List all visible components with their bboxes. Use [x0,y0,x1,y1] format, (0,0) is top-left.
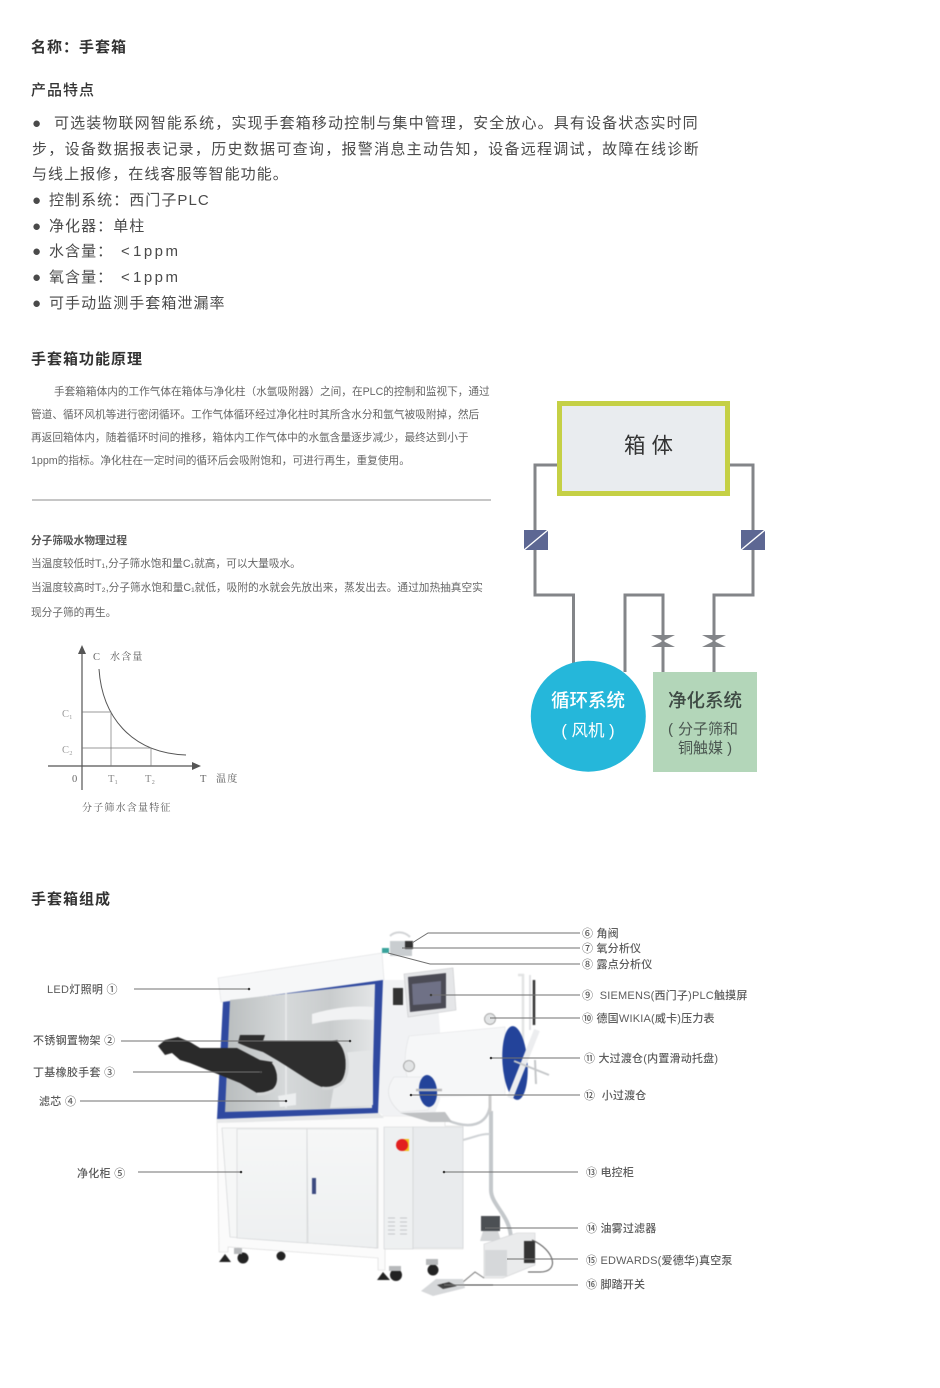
cabinet frame [217,1116,463,1270]
labels: right callouts: ⑬ 电控柜 [586,1167,634,1179]
box: purification system: 净化系统 [668,690,742,711]
text block: molecular sieve process: 当温度较低时T₁,分子筛水饱和量C₁就高，可以大量吸水。 [31,558,301,570]
chart: molecular sieve water content curve: C₂ [62,745,73,756]
labels: right callouts: ⑮ EDWARDS(爱德华)真空泵 [586,1255,733,1267]
text block: product features list: 可手动监测手套箱泄漏率 [49,295,226,312]
text block: product features list: 与线上报修，在线客服等智能功能。 [32,166,289,183]
labels: left callouts: 净化柜 ⑤ [77,1168,126,1180]
icon: left filter valve [524,530,548,550]
text block: product features list: 步，设备数据报表记录，历史数据可查询，报警消息主动告知，设备远程调试，故障在线诊断 [32,141,700,158]
labels: right callouts: ⑭ 油雾过滤器 [586,1223,656,1235]
labels: right callouts: ⑨ SIEMENS(西门子)PLC触摸屏 [582,990,748,1002]
text block: product features list: 净化器：单柱 [49,218,145,235]
text block: principle description [31,386,490,467]
icon: left butterfly valve [651,635,675,647]
window with blue frame [217,980,383,1119]
text block: molecular sieve process [31,534,483,619]
labels: right callouts: ⑥ 角阀 [582,928,619,940]
text block: principle description: 手套箱箱体内的工作气体在箱体与净化柱（水氩吸附器）之间，在PLC的控制和监视下，通过 [54,386,490,398]
text block: product features list: < [121,269,131,286]
chart: molecular sieve water content curve: C [93,652,100,663]
text block: product features list: ● [32,295,42,312]
labels: right callouts: ⑯ 脚踏开关 [586,1279,645,1291]
chart: molecular sieve water content curve: 水含量 [110,650,144,663]
labels: left callouts: 丁基橡胶手套 ③ [33,1067,115,1079]
title: 名称：手套箱 [31,39,127,56]
text block: product features list: ● [32,218,42,235]
text block: product features list: ● [32,115,42,132]
labels: right callouts: ⑪ 大过渡仓(内置滑动托盘) [584,1053,718,1065]
labels: left callouts [33,984,126,1180]
text block: product features list: ● [32,243,42,260]
circle: circulation system: 循环系统 [551,690,625,711]
box: purification system: 分子筛和 [678,721,738,738]
chart: molecular sieve water content curve: 0 [72,774,77,785]
chart: molecular sieve water content curve: T₁ [108,774,118,785]
labels: right callouts [582,928,748,1291]
touch panel and analyzers [382,932,456,1017]
box: purification system: ( [668,721,673,738]
transfer chambers [389,980,549,1112]
casters and feet [219,1244,447,1281]
box: chamber [560,404,728,494]
text block: product features list: ● [32,192,42,209]
chart: molecular sieve water content curve: 温度 [216,772,238,785]
text block: principle description: 再返回箱体内，随着循环时间的推移，箱体内工作气体中的水氩含量逐步减少，最终达到小于 [31,432,469,444]
chart: molecular sieve water content curve: 分子筛水含量特征 [82,801,172,814]
text block: molecular sieve process: 分子筛吸水物理过程 [31,535,127,547]
chart: molecular sieve water content curve: T [200,774,207,785]
labels: right callouts: ⑧ 露点分析仪 [582,959,652,971]
box: chamber: 箱 体 [624,434,673,458]
text block: molecular sieve process: 当温度较高时T₂,分子筛水饱和量C₁就低，吸附的水就会先放出来，蒸发出去。通过加热抽真空实 [31,582,483,594]
text block: principle description: 管道、循环风机等进行密闭循环。工作气体循环经过净化柱时其所含水分和氩气被吸附掉，然后 [31,409,479,421]
top body [217,953,452,1123]
heading: working principle: 手套箱功能原理 [31,351,143,368]
text block: molecular sieve process: 现分子筛的再生。 [31,607,116,619]
heading: product features: 产品特点 [31,82,95,99]
pump and pipes [421,975,552,1296]
labels: left callouts: 不锈钢置物架 ② [33,1035,115,1047]
text block: product features list: < [121,243,131,260]
pipes [535,465,753,672]
icon: right butterfly valve [702,635,726,647]
labels: right callouts: ⑦ 氧分析仪 [582,943,641,955]
icon: right filter valve [741,530,765,550]
text block: product features list: 1ppm [133,269,181,286]
text block: product features list [32,115,700,312]
chart: molecular sieve water content curve: T₂ [145,774,155,785]
labels: right callouts: ⑩ 德国WIKIA(威卡)压力表 [582,1013,715,1025]
text block: product features list: ● [32,269,42,286]
circle: circulation system [531,661,646,772]
labels: left callouts: 滤芯 ④ [39,1096,76,1108]
heading: composition: 手套箱组成 [31,891,111,908]
text block: product features list: 1ppm [133,243,181,260]
box: purification system [653,672,757,772]
text block: product features list: 氧含量： [49,269,113,286]
box: purification system: 铜触媒 ) [678,740,732,757]
circle: circulation system: ( 风机 ) [561,721,615,740]
gloves [158,1035,347,1094]
labels: left callouts: LED灯照明 ① [47,984,118,996]
chart: molecular sieve water content curve: C₁ [62,709,73,720]
text block: product features list: 控制系统：西门子PLC [49,192,210,209]
text block: principle description: 1ppm的指标。净化柱在一定时间的循环后会吸附饱和，可进行再生，重复使用。 [31,455,410,467]
text block: product features list: 水含量： [49,243,113,260]
labels: right callouts: ⑫ 小过渡仓 [584,1090,647,1102]
text block: product features list: 可选装物联网智能系统，实现手套箱移动控制与集中管理，安全放心。具有设备状态实时同 [54,115,699,132]
